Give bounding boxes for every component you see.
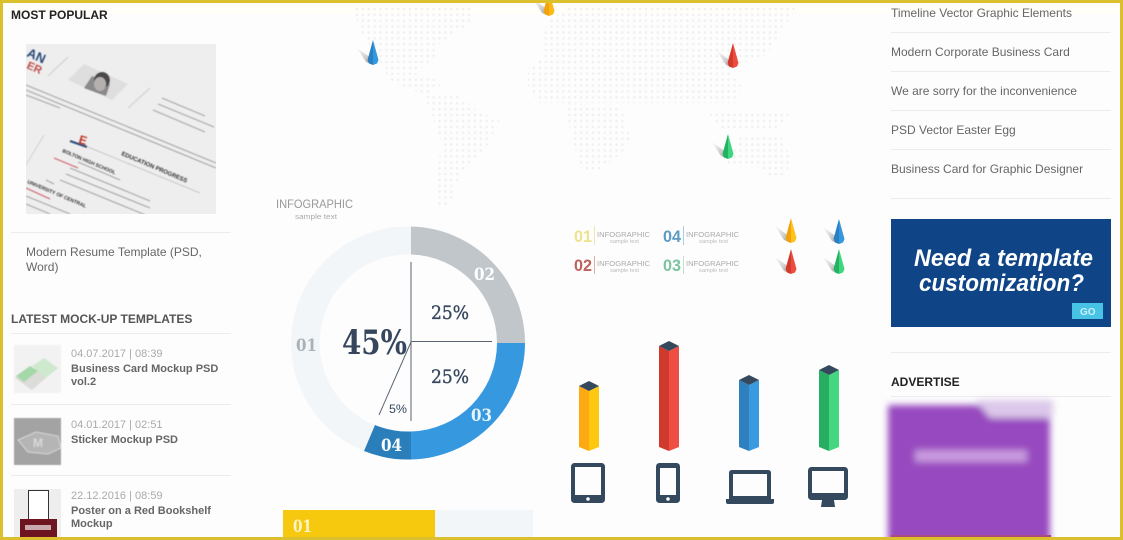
panel: most popular <box>11 8 231 274</box>
resume thumbnail image: AN <box>25 45 48 66</box>
progress bar: 01 <box>293 517 312 537</box>
progress bar <box>283 510 533 538</box>
donut segment 03 <box>411 343 525 460</box>
chart heading: INFOGRAPHIC <box>276 197 353 211</box>
bar chart <box>571 341 848 507</box>
banner: template customization <box>891 219 1111 327</box>
link: business card: Modern Corporate Business Card <box>891 45 1070 59</box>
legend entry 01: INFOGRAPHIC <box>597 230 651 239</box>
popular item title: Word) <box>26 260 58 274</box>
resume thumbnail image: BOLTON HIGH SCHOOL <box>61 148 116 176</box>
legend entry 04 <box>663 226 740 246</box>
legend entry 01 <box>574 226 651 246</box>
icon: laptop <box>726 470 774 504</box>
legend pin: red <box>775 249 796 274</box>
link: designer card: Business Card for Graphic Designer <box>891 162 1083 176</box>
panel: right sidebar links <box>891 6 1111 198</box>
map pin: red <box>717 43 738 68</box>
text: item one: Business Card Mockup PSD <box>71 363 218 375</box>
thumbnail: business card mockup <box>14 345 61 393</box>
legend entry 03 <box>663 256 740 275</box>
text: item three: Poster on a Red Bookshelf <box>71 505 211 517</box>
panel: donut chart <box>276 197 525 460</box>
icon: tablet <box>571 463 605 503</box>
resume thumbnail image: ER <box>25 60 44 77</box>
map pin: yellow <box>533 0 554 16</box>
legend entry 02 <box>574 256 651 275</box>
resume thumbnail image: E <box>77 132 89 148</box>
icon: phone <box>656 463 680 503</box>
legend entry 02: sample text <box>610 268 639 274</box>
banner: template customization: Need a template <box>914 245 1093 272</box>
segment labels: 03 <box>471 406 492 426</box>
panel: advertise <box>888 375 1111 540</box>
chart guide lines <box>379 262 492 421</box>
panel: latest mock-up templates <box>11 312 231 537</box>
segment labels: 04 <box>381 436 402 456</box>
link: easter egg: PSD Vector Easter Egg <box>891 123 1016 137</box>
icon: monitor <box>808 467 848 507</box>
popular item title: Modern Resume Template (PSD, <box>26 245 202 259</box>
value labels: 25% <box>431 366 469 388</box>
text: item two <box>71 419 178 446</box>
text: item three: 22.12.2016 | 08:59 <box>71 490 163 502</box>
heading: latest mock-up templates: LATEST MOCK-UP TEMPLATES <box>11 312 192 326</box>
value labels: 25% <box>431 302 469 324</box>
heading: most popular: MOST POPULAR <box>11 8 108 22</box>
thumbnail: sticker mockup: M <box>33 436 43 450</box>
legend <box>574 218 844 275</box>
go button <box>1072 303 1103 319</box>
legend entry 03: sample text <box>699 268 728 274</box>
segment labels: 02 <box>474 265 495 285</box>
world dot map <box>352 8 797 207</box>
text: item one <box>71 348 218 388</box>
bar: red <box>659 341 679 451</box>
heading: advertise: ADVERTISE <box>891 375 960 389</box>
map pin: blue <box>357 40 378 65</box>
legend entry 04: INFOGRAPHIC <box>686 230 740 239</box>
top tint strip <box>3 3 1120 14</box>
donut segment 01 <box>291 226 411 451</box>
text: item one: vol.2 <box>71 376 96 388</box>
donut segment 02 <box>411 226 525 343</box>
legend entry 04: 04 <box>663 227 682 246</box>
chart heading: sample text <box>295 214 337 221</box>
map pin: green <box>712 134 734 159</box>
legend entry 04: sample text <box>699 239 728 245</box>
bar: yellow <box>579 381 599 451</box>
legend pin: blue <box>823 219 844 244</box>
go button: GO <box>1080 307 1096 318</box>
blurred ad image <box>888 400 1053 540</box>
link: sorry: We are sorry for the inconvenience <box>891 84 1077 98</box>
text: item three: Mockup <box>71 518 113 530</box>
resume thumbnail image: EDUCATION PROGRESS <box>120 151 188 185</box>
link: timeline: Timeline Vector Graphic Elements <box>891 6 1072 20</box>
segment labels: 01 <box>296 336 317 356</box>
value labels: 45% <box>342 323 407 363</box>
legend entry 02: INFOGRAPHIC <box>597 259 651 268</box>
thumbnail: poster on bookshelf <box>14 489 61 537</box>
resume thumbnail image <box>25 44 216 216</box>
segment labels <box>296 265 495 456</box>
bar: blue <box>739 375 759 451</box>
banner: template customization: customization? <box>919 270 1084 297</box>
text: item two: Sticker Mockup PSD <box>71 434 178 446</box>
legend pin: green <box>823 249 844 274</box>
text: item one: 04.07.2017 | 08:39 <box>71 348 163 360</box>
legend entry 03: INFOGRAPHIC <box>686 259 740 268</box>
legend entry 01: 01 <box>574 227 592 246</box>
divider <box>11 232 231 234</box>
legend entry 03: 03 <box>663 256 681 275</box>
legend pin: yellow <box>775 218 796 243</box>
resume thumbnail image: UNIVERSITY OF CENTRAL <box>26 179 87 210</box>
value labels <box>342 302 469 416</box>
value labels: 5% <box>389 402 407 416</box>
text: item two: 04.01.2017 | 02:51 <box>71 419 163 431</box>
thumbnail: sticker mockup <box>14 418 61 465</box>
donut segment 04 <box>364 425 411 460</box>
chart heading <box>276 197 353 221</box>
text: item three <box>71 490 211 530</box>
legend entry 01: sample text <box>610 239 639 245</box>
legend entry 02: 02 <box>574 256 592 275</box>
bar: green <box>819 365 839 451</box>
